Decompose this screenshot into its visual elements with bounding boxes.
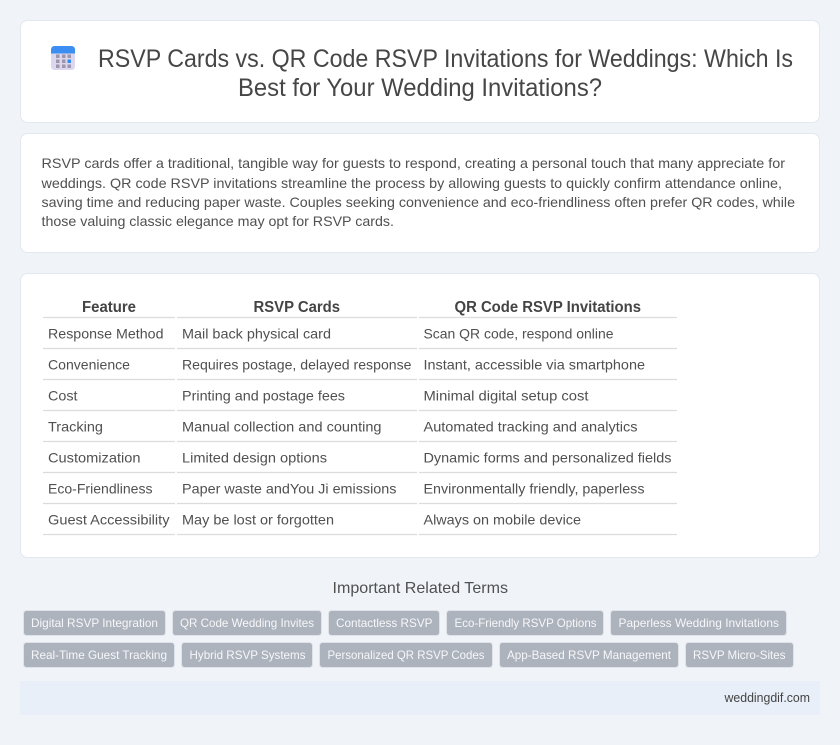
table row: tracking xyxy=(48,418,638,434)
table row: cost: Minimal digital setup cost xyxy=(424,388,589,404)
text block: summary: RSVP cards offer a traditional, tangible way for guests to respond, creating a personal touch that many appreciate for xyxy=(42,155,785,171)
tag xyxy=(500,642,678,668)
tag xyxy=(320,642,492,668)
title: Best for Your Wedding Invitations? xyxy=(238,74,602,102)
table row: eco-friendliness xyxy=(48,480,644,496)
panel: header xyxy=(20,20,820,122)
table row: cost xyxy=(48,388,589,404)
table header: QR Code RSVP Invitations xyxy=(454,299,641,316)
tag: App-Based RSVP Management xyxy=(507,648,672,662)
tag: Paperless Wedding Invitations xyxy=(618,616,779,630)
tag: Personalized QR RSVP Codes xyxy=(328,648,484,662)
table row: customization xyxy=(48,450,672,466)
table row: response method: Scan QR code, respond online xyxy=(424,326,614,342)
text block: summary: weddings. QR code RSVP invitations streamline the process by allowing guests to quickly confirm attendance online, xyxy=(40,175,782,191)
footer source text: weddingdif.com xyxy=(724,691,810,705)
table row: response method: Response Method xyxy=(48,326,164,342)
tag xyxy=(610,610,786,636)
tag xyxy=(686,642,794,668)
footer xyxy=(20,681,820,715)
text block: summary xyxy=(40,155,795,229)
table header: Feature xyxy=(82,299,136,316)
table row: eco-friendliness: Eco-Friendliness xyxy=(48,480,152,496)
title xyxy=(98,45,793,102)
tag: Digital RSVP Integration xyxy=(31,616,158,630)
table row: convenience: Requires postage, delayed response xyxy=(182,356,412,372)
table row: cost: Printing and postage fees xyxy=(182,388,345,404)
related term tags xyxy=(24,610,794,668)
tag: Contactless RSVP xyxy=(336,616,432,630)
table row: tracking: Tracking xyxy=(48,418,103,434)
table row: guest accessibility xyxy=(48,512,581,528)
table row: guest accessibility: Guest Accessibility xyxy=(48,512,170,528)
table header xyxy=(82,299,641,316)
table row: customization: Customization xyxy=(48,450,140,466)
tag: Hybrid RSVP Systems xyxy=(190,648,306,662)
table row: customization: Limited design options xyxy=(182,450,327,466)
table row: customization: Dynamic forms and personalized fields xyxy=(424,450,672,466)
tag: RSVP Micro-Sites xyxy=(693,648,786,662)
panel: comparison table xyxy=(20,274,820,558)
tag xyxy=(446,610,604,636)
tag xyxy=(328,610,440,636)
table row: guest accessibility: May be lost or forgotten xyxy=(182,512,334,528)
title: RSVP Cards vs. QR Code RSVP Invitations for Weddings: Which Is xyxy=(98,45,793,73)
tag: QR Code Wedding Invites xyxy=(180,616,314,630)
table row: tracking: Manual collection and counting xyxy=(182,418,382,434)
table row: cost: Cost xyxy=(48,388,78,404)
table row: response method: Mail back physical card xyxy=(182,326,331,342)
heading: related terms: Important Related Terms xyxy=(332,580,508,597)
table row: convenience xyxy=(48,356,645,372)
table header: RSVP Cards xyxy=(254,299,340,316)
table row: eco-friendliness: Paper waste andYou Ji emissions xyxy=(182,480,396,496)
text block: summary: saving time and reducing paper waste. Couples seeking convenience and eco-friendliness often prefer QR codes, while xyxy=(42,194,795,210)
tag: Eco-Friendly RSVP Options xyxy=(454,616,596,630)
table row: eco-friendliness: Environmentally friendly, paperless xyxy=(424,480,644,496)
tag xyxy=(24,610,166,636)
table row: convenience: Instant, accessible via smartphone xyxy=(424,356,645,372)
table row: guest accessibility: Always on mobile device xyxy=(424,512,581,528)
tag xyxy=(24,642,174,668)
table row: convenience: Convenience xyxy=(48,356,130,372)
tag xyxy=(172,610,322,636)
table row: response method xyxy=(48,326,614,342)
text block: summary: those valuing classic elegance may opt for RSVP cards. xyxy=(42,213,394,229)
icon: calendar xyxy=(51,46,75,70)
panel: summary paragraph xyxy=(20,134,820,252)
table row: tracking: Automated tracking and analytics xyxy=(424,418,638,434)
tag: Real-Time Guest Tracking xyxy=(31,648,167,662)
tag xyxy=(182,642,312,668)
